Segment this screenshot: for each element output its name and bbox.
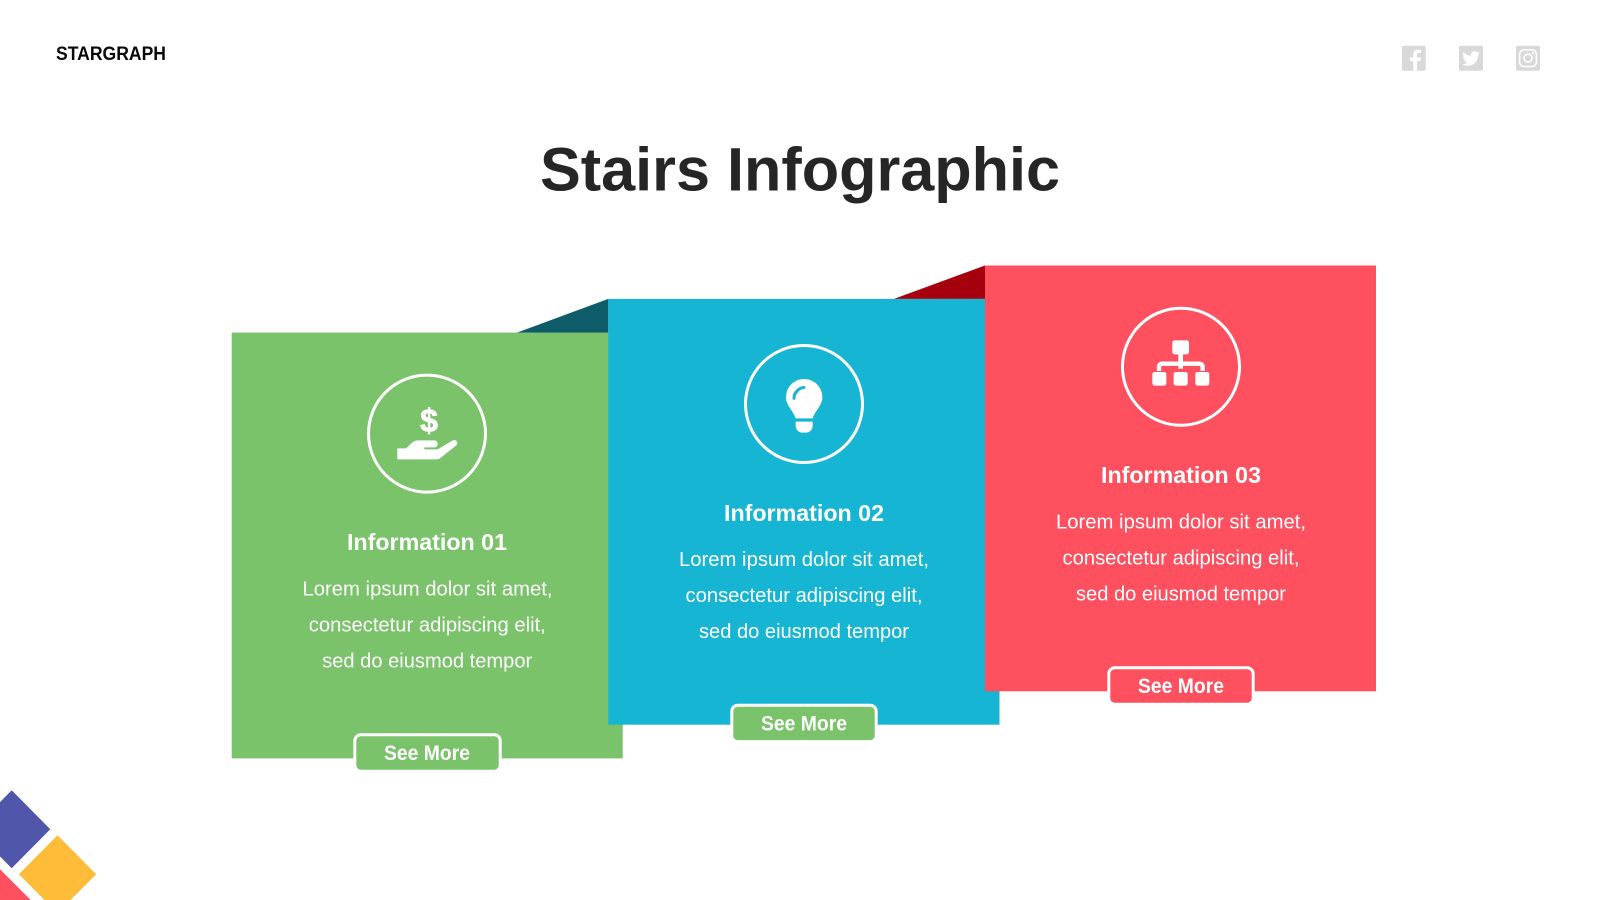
card background [232,333,623,758]
body text [679,548,929,643]
body text: sed do eiusmod tempor [699,620,909,643]
body text: Lorem ipsum dolor sit amet, [679,548,929,571]
body text: consectetur adipiscing elit, [309,613,546,636]
heading: Information 01 [347,529,507,555]
button: See More [384,741,470,765]
icon: light bulb [746,346,862,462]
body text: consectetur adipiscing elit, [686,584,922,607]
button: See More [761,712,847,736]
heading: Information 02 [724,500,884,526]
fold: teal triangle [517,299,608,333]
body text: sed do eiusmod tempor [1076,582,1286,606]
icon: instagram [1516,46,1540,71]
panel: information 03 [985,266,1376,704]
button [732,705,876,742]
card background [985,266,1376,691]
icon: twitter [1459,46,1483,71]
button [1109,668,1253,704]
body text [1056,510,1306,606]
icon: facebook [1402,46,1426,71]
body text: consectetur adipiscing elit, [1062,546,1300,570]
panel: information 01 [232,333,623,771]
button: See More [1138,674,1224,698]
button [355,735,500,771]
body text: sed do eiusmod tempor [322,649,532,672]
heading: Information 03 [1101,462,1261,488]
panel: information 02 [608,299,1000,742]
social icons [1402,46,1540,71]
card background [608,299,1000,725]
body text: Lorem ipsum dolor sit amet, [302,577,552,600]
fold: dark red triangle [894,266,985,299]
icon: hand with dollar: $ [420,402,438,438]
body text [302,577,552,672]
icon: org chart [1122,308,1240,425]
logo: STARGRAPH [56,43,166,65]
decorative diamonds [0,790,96,900]
title: Stairs Infographic [540,136,1060,204]
body text: Lorem ipsum dolor sit amet, [1056,510,1306,534]
icon: hand with dollar [368,375,486,492]
